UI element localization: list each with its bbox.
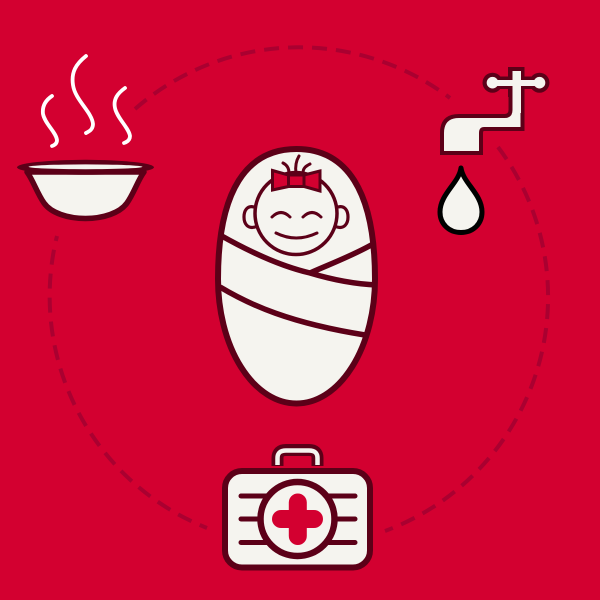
kit case — [225, 471, 370, 568]
kit handle highlight — [278, 450, 318, 465]
wrap folds — [220, 235, 377, 335]
smile — [276, 233, 317, 238]
kit handle — [278, 450, 318, 466]
icon: first aid kit — [225, 450, 370, 568]
icon: water tap — [440, 67, 550, 232]
tap body — [442, 69, 522, 153]
bow — [272, 170, 320, 191]
water drop — [440, 168, 482, 232]
bowl rim opening — [28, 164, 142, 169]
steam — [43, 56, 130, 146]
icon: steaming bowl — [17, 56, 154, 218]
tap handle outline — [482, 67, 550, 97]
icon: swaddled baby — [218, 149, 377, 403]
dashed circle connecting the icons — [50, 47, 548, 531]
red cross — [281, 502, 314, 536]
tap handle fill — [487, 71, 545, 113]
kit emblem circle — [260, 482, 334, 556]
eyes — [272, 212, 321, 217]
hair — [283, 156, 310, 173]
kit stripes — [241, 496, 355, 542]
bowl rim — [17, 160, 154, 175]
swaddle — [218, 149, 375, 403]
head — [255, 172, 337, 254]
bowl body — [27, 172, 144, 218]
ears — [244, 207, 348, 227]
